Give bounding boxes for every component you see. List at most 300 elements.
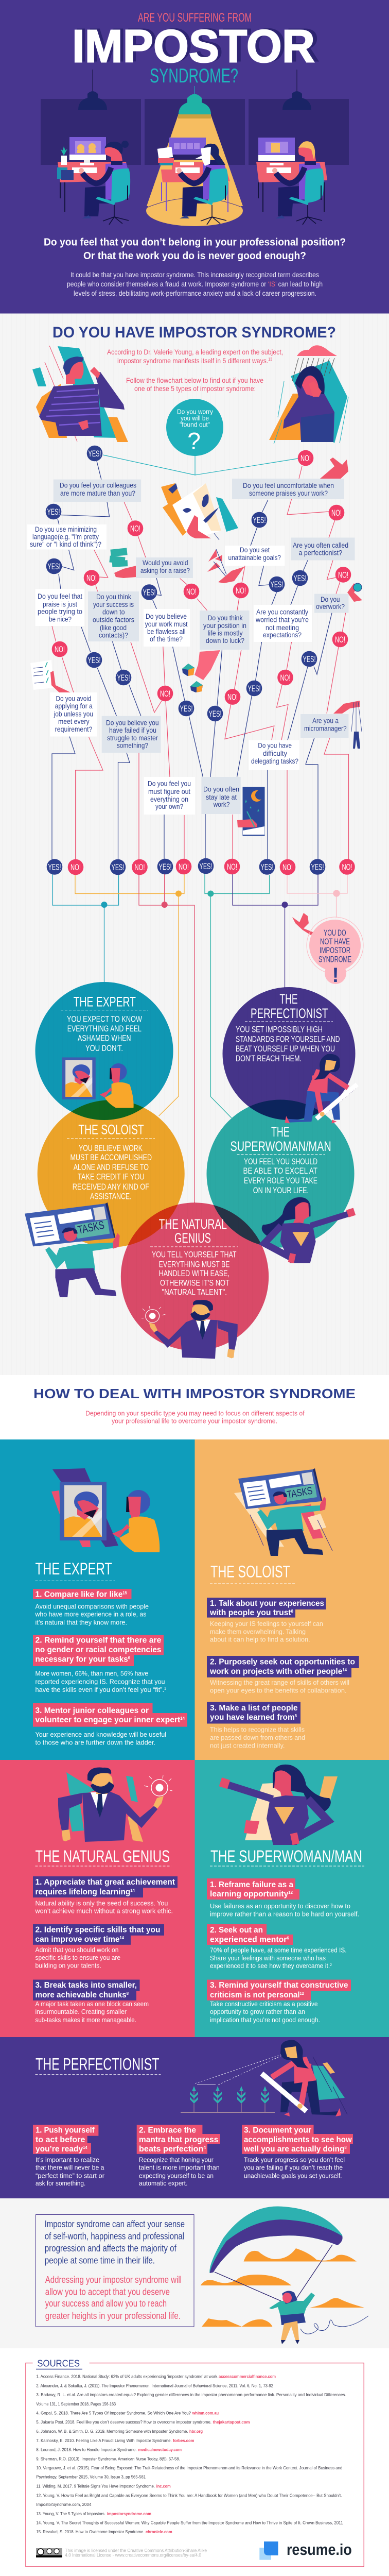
- logo: resume.io: [259, 2540, 352, 2560]
- question: flawless work: your work must: [145, 620, 188, 628]
- question: figure out on your own: Do you feel you: [148, 780, 191, 788]
- question: praise is just people being nice: Do you feel that: [38, 592, 82, 600]
- tip 3: Take constructive criticism as a positive: [210, 2001, 318, 2008]
- tip 3: 8: [127, 1991, 129, 1996]
- illustration: soloist carrying tasks board: TASKS: [77, 1218, 105, 1236]
- reference list: forbes.com: [173, 2438, 194, 2443]
- callout box: allow you to accept that you deserve: [45, 2286, 170, 2297]
- tip 3: volunteer to engage your inner expert: [35, 1716, 183, 1724]
- panel: the perfectionist: [0, 2037, 389, 2198]
- licence text: This image is licensed under the Creative Commons Attribution-Share Alike: [65, 2548, 207, 2553]
- tip 1: [207, 1878, 359, 1918]
- question: praise is just people being nice: praise is just: [43, 601, 77, 608]
- question: outside factors: down to: [102, 608, 125, 616]
- tip 2: have the skills even if you don’t feel you “fit”.: [35, 1686, 162, 1693]
- question: minimizing language: [27, 524, 107, 549]
- question: unattainable goals: [225, 546, 285, 566]
- question lines: Or that the work you do is never good enough?: [83, 250, 306, 262]
- heading: do you have impostor syndrome: DO YOU HAVE IMPOSTOR SYNDROME?: [52, 324, 336, 341]
- text: the natural genius: THE NATURAL: [159, 1216, 227, 1232]
- intro text: flowchart: [107, 348, 283, 393]
- eyebrow: are you suffering from: ARE YOU SUFFERING FROM: [138, 11, 252, 25]
- text: the perfectionist: BEAT YOURSELF UP WHEN YOU: [236, 1044, 335, 1054]
- question: flawless work: [144, 609, 190, 647]
- question: flawless work: be flawless all: [147, 628, 186, 636]
- tip 3: more achievable chunks: [35, 1991, 131, 1999]
- reference list: hbr.org: [189, 2429, 203, 2434]
- illustration: expert at mirror: [62, 1057, 134, 1108]
- illustration: natural genius with light bulb: [142, 1300, 238, 1359]
- tip 1: [33, 1589, 149, 1626]
- tip 2: beats perfection: [139, 2145, 203, 2154]
- illustration: soloist and tasks board: TASKS: [286, 1485, 313, 1501]
- callout box: [36, 2214, 194, 2327]
- yes and no answer nodes: NO!: [227, 692, 238, 702]
- question: perfectionist: a perfectionist?: [298, 549, 342, 556]
- icon: night desk and writing hand: [237, 787, 264, 836]
- yes and no answer nodes: YES!: [48, 862, 61, 872]
- centre workstation with masked person: [157, 138, 230, 225]
- tip 2: [207, 1924, 347, 1970]
- tip 2: 2. Embrace the: [139, 2126, 196, 2134]
- connector: yes routes to the expert: [52, 874, 118, 982]
- question: stay late: Do you often: [203, 786, 239, 793]
- text: the superwoman/man: ON IN YOUR LIFE.: [253, 1185, 309, 1195]
- question: overwork: overwork?: [316, 603, 345, 611]
- illustration: expert and mirror: [51, 1468, 160, 1552]
- heading: the expert: THE EXPERT: [35, 1560, 112, 1578]
- text: the soloist: TAKE CREDIT IF YOU: [78, 1172, 145, 1182]
- tip 1: 1. Push yourself: [36, 2126, 95, 2134]
- tip 2: 2. Purposely seek out opportunities to: [210, 1658, 355, 1667]
- reference list: accesscommercialfinance.com: [219, 2374, 276, 2379]
- yes and no answer nodes: YES!: [89, 449, 101, 459]
- tip 3: Track your progress so you don’t feel: [244, 2157, 345, 2164]
- yes and no answer nodes: YES!: [260, 862, 274, 872]
- reference list: chronicle.com: [146, 2529, 172, 2534]
- callout box: Impostor syndrome can affect your sense: [45, 2218, 185, 2229]
- question: praise: someone praises your work?: [249, 489, 328, 497]
- right workstation: [256, 138, 327, 225]
- reference list: 3. Badawy, R. L. et al. Are all impostors created equal? Exploring gender differences in the impostor phenomenon-performance link. Personality and Individual Differences.: [36, 2392, 346, 2397]
- yes and no answer nodes: YES!: [180, 704, 192, 714]
- text: the perfectionist: PERFECTIONIST: [251, 1006, 328, 1021]
- question: stay late: [202, 777, 241, 814]
- tip 1: “perfect time” to start or: [36, 2172, 104, 2179]
- yes and no answer nodes: NO!: [186, 587, 197, 597]
- section: how to deal heading block: [0, 1375, 389, 1439]
- illustration: sad woman under rain cloud: [269, 345, 348, 444]
- question: minimizing language: Do you use minimizing: [35, 526, 97, 533]
- tip 3: 12: [300, 1991, 305, 1996]
- licence text: [65, 2548, 207, 2558]
- yes and no answer nodes: YES!: [271, 580, 283, 589]
- illustration: superwoman: [219, 1765, 338, 1845]
- reference list: 1. Access Finance. 2018. National Study: 62% of UK adults experiencing ‘imposter syndrome’ at work.: [36, 2374, 218, 2379]
- tip 2: 2. Identify specific skills that you: [35, 1926, 161, 1935]
- question: perfectionist: [291, 538, 355, 561]
- tip 2: 2: [330, 1963, 332, 1967]
- reference list: impostorsyndrome.com: [107, 2511, 151, 2516]
- yes and no answer nodes: NO!: [331, 508, 342, 518]
- type circles group: [35, 982, 355, 1351]
- reference list: 2. Alexander, J. & Sakulku, J. (2011). The Impostor Phenomenon. International Journal of Behavioral Science, 2011, Vol. 6, No. 1, 73-92: [36, 2383, 273, 2388]
- text: the soloist: RECEIVED ANY KIND OF: [73, 1182, 149, 1192]
- tip 2: automatic expert.: [139, 2180, 187, 2187]
- yes and no answer nodes: YES!: [293, 573, 307, 583]
- question: praise: Do you feel uncomfortable when: [243, 482, 334, 489]
- question: outside factors: [88, 591, 139, 641]
- question: praise: [232, 479, 344, 499]
- yes and no answer nodes: YES!: [303, 654, 316, 664]
- tip 1: requires lifelong learning: [35, 1888, 134, 1896]
- tip 3: insurmountable. Creating smaller: [35, 2008, 127, 2015]
- tip 3: 3. Remind yourself that constructive: [210, 1981, 348, 1990]
- connector: routes to the superwoman/man: [205, 874, 270, 1118]
- text: the natural genius: "NATURAL TALENT".: [162, 1287, 227, 1297]
- callout box: people at some time in their life.: [45, 2255, 155, 2266]
- text: the perfectionist: DON'T REACH THEM.: [236, 1054, 302, 1063]
- reference list: inc.com: [156, 2483, 171, 2488]
- question: delegating: delegating tasks?: [251, 757, 298, 765]
- question: luck: [200, 611, 250, 650]
- reference list: 13. Young, V. The 5 Types of Impostors.: [36, 2511, 105, 2516]
- illustration: perfectionist with ruler: [285, 1054, 357, 1124]
- panel: the superwoman/man: [194, 1760, 389, 2037]
- tip 1: make them overwhelming. Talking: [210, 1629, 306, 1636]
- question: job requirements: [50, 692, 97, 737]
- question lines: [44, 237, 346, 262]
- text: the superwoman/man: BE ABLE TO EXCEL AT: [243, 1166, 317, 1176]
- text: the soloist: MUST BE ACCOMPLISHED: [70, 1153, 152, 1162]
- panel: the expert: [0, 1439, 194, 1760]
- start node: do you worry: [166, 399, 223, 456]
- yes and no answer nodes: NO!: [342, 862, 352, 872]
- yes and no answer nodes: YES!: [111, 862, 125, 872]
- tip 1: 14: [83, 2145, 87, 2150]
- tip 2: experienced mentor: [210, 1935, 288, 1944]
- tip 2: work on projects with other people: [210, 1667, 346, 1676]
- tip 2: Admit that you should work on: [35, 1946, 119, 1954]
- yes and no answer nodes: YES!: [47, 562, 61, 571]
- question: delegating: Do you have: [258, 742, 292, 750]
- intro paragraph: people who consider themselves a fraud at work. Imposter syndrome or ‘IS’ can lead to high: [67, 280, 323, 288]
- question: job requirements: meet every: [58, 718, 90, 725]
- question: figure out on your own: everything on: [150, 795, 188, 803]
- tip 2: 14: [342, 1668, 347, 1672]
- callout box: Addressing your impostor syndrome will: [45, 2274, 182, 2285]
- intro text: flowchart: one of these 5 types of impostor syndrome:: [134, 384, 256, 393]
- text: the perfectionist: STANDARDS FOR YOURSELF AND: [236, 1035, 340, 1044]
- tip 3: [33, 1979, 149, 2024]
- yes and no answer nodes: NO!: [227, 862, 237, 872]
- tip 2: [33, 1635, 166, 1693]
- panel: the natural genius: [0, 1760, 194, 2037]
- text: the superwoman/man: [231, 1124, 331, 1195]
- yes and no answer nodes: YES!: [311, 862, 324, 872]
- reference list: 7. Kalinosky, E. 2010. Feeling Like A Fraud: Living With Impostor Syndrome.: [36, 2438, 172, 2443]
- tip 1: with people you trust: [210, 1608, 293, 1617]
- tip 2: Share your feelings with someone who has: [210, 1955, 326, 1962]
- yes and no answer nodes: [46, 446, 355, 875]
- tip 3: 5: [295, 1714, 297, 1718]
- left workstation: [57, 137, 130, 225]
- yes and no answer nodes: NO!: [86, 573, 97, 583]
- start node: do you worry: you will be: [181, 414, 209, 422]
- yes and no answer nodes: NO!: [70, 862, 81, 872]
- section: conclusion: [0, 2198, 389, 2348]
- question lines: Do you feel that you don’t belong in your professional position?: [44, 237, 346, 248]
- tip 3: A major task taken as one block can seem: [35, 2001, 149, 2008]
- text: the perfectionist: YOU SET IMPOSSIBLY HIGH: [236, 1024, 323, 1034]
- text: the superwoman/man: YOU FEEL YOU SHOULD: [244, 1157, 317, 1166]
- text: the superwoman/man: SUPERWOMAN/MAN: [231, 1139, 331, 1154]
- callout box: of self-worth, happiness and professional: [45, 2230, 184, 2241]
- icon: thumbs up hand: [320, 457, 348, 479]
- text: the superwoman/man: EVERY ROLE YOU TAKE: [244, 1176, 317, 1185]
- yes and no answer nodes: NO!: [55, 645, 65, 654]
- text: the expert: ASHAMED WHEN: [78, 1033, 131, 1043]
- icon: hand and dice: [182, 650, 220, 692]
- question: job requirements: job unless you: [54, 710, 93, 718]
- section: flowchart background: [0, 313, 389, 1375]
- result: you do not have impostor syndrome: SYNDROME: [319, 955, 351, 964]
- tip 2: 2. Remind yourself that there are: [35, 1636, 161, 1645]
- tip 1: Avoid unequal comparisons with people: [35, 1603, 149, 1611]
- intro text: flowchart: Follow the flowchart below to find out if you have: [126, 376, 263, 384]
- tip 1: 1. Appreciate that great achievement: [35, 1878, 175, 1887]
- text: the expert: EVERYTHING AND FEEL: [67, 1024, 142, 1033]
- tip 2: 4: [203, 2145, 206, 2150]
- question: micromanager: [300, 714, 349, 738]
- intro text: flowchart: impostor syndrome manifests itself in 5 different ways.: [117, 357, 290, 365]
- question: job requirements: applying for a: [55, 702, 93, 710]
- result: you do not have impostor syndrome: !: [332, 964, 339, 987]
- text: the natural genius: HANDLED WITH EASE,: [159, 1268, 229, 1278]
- text: the soloist: THE SOLOIST: [78, 1122, 144, 1138]
- tip 2: [207, 1656, 359, 1694]
- question: outside factors: (like good: [100, 624, 127, 632]
- reference list: 10. Vergauwe, J. et al. (2015). Fear of Being Exposed: The Trait-Relatedness of the Impostor Phenomenon and its Relevance in the Work Context. Journal of Business and: [36, 2465, 343, 2470]
- question: job requirements: Do you avoid: [56, 695, 92, 703]
- question: stay late: work?: [213, 801, 229, 808]
- yes and no answer nodes: NO!: [179, 862, 189, 872]
- tip 2: Witnessing the great range of skills of others will: [210, 1679, 349, 1686]
- start node: do you worry: ?: [187, 428, 201, 454]
- tip 1: 15: [122, 1591, 128, 1596]
- tip 2: 1: [164, 1687, 166, 1691]
- question: job requirements: requirement?: [55, 725, 92, 733]
- heading: the soloist: THE SOLOIST: [210, 1562, 290, 1581]
- callout box: progression and affects the majority of: [45, 2243, 176, 2253]
- tip 2: Recognize that honing your: [139, 2157, 214, 2164]
- icon: flags in hand: [207, 549, 244, 583]
- reference list: 8. Leonard, J. 2018. How to Handle Impostor Syndrome.: [36, 2447, 137, 2452]
- tip 2: talent is more important than: [139, 2164, 220, 2172]
- tip 3: 3. Mentor junior colleagues or: [35, 1706, 149, 1715]
- icon: stopwatch and hand: [347, 583, 362, 602]
- tip 3: 8: [344, 2145, 347, 2150]
- text: the perfectionist: [236, 991, 340, 1063]
- intro text: flowchart: 13: [268, 357, 272, 362]
- section: sources: [0, 2348, 389, 2576]
- yes and no answer nodes: YES!: [87, 655, 101, 665]
- reference list: 5. Jakarta Post. 2018. Feel like you don’t deserve success? How to overcome impostor syndrome.: [36, 2419, 211, 2425]
- result: you do not have impostor syndrome: NOT HAVE: [320, 937, 350, 946]
- tip 2: specific skills to ensure you are: [35, 1954, 120, 1961]
- question: figure out on your own: [144, 777, 195, 815]
- yes and no answer nodes: NO!: [135, 862, 145, 872]
- illustration: soloist and tasks board: [234, 1468, 332, 1556]
- tip 1: 1. Talk about your experiences: [210, 1599, 324, 1608]
- circle: the natural genius: [121, 1202, 269, 1351]
- yes and no answer nodes: YES!: [209, 709, 221, 719]
- tip 3: well you are actually doing: [244, 2145, 349, 2154]
- icon: checklist and hand: [30, 660, 70, 692]
- tip 3: [33, 1703, 187, 1747]
- text: the soloist: [67, 1122, 155, 1201]
- spotlight cone: [146, 114, 243, 226]
- text: the expert: [61, 994, 148, 1053]
- yes and no answer nodes: YES!: [143, 587, 155, 598]
- intro paragraph: levels of stress, debilitating work-performance anxiety and a lack of career progression.: [74, 290, 316, 297]
- licence text: 4.0 International License - www.creativecommons.org/licenses/by-sa/4.0: [65, 2552, 201, 2558]
- icon: creative commons badge: [36, 2548, 62, 2557]
- question: luck: your position in: [203, 622, 246, 630]
- question: colleagues: Do you feel your colleagues: [60, 482, 136, 489]
- tip 1: [33, 2125, 104, 2187]
- yes and no answer nodes: YES!: [248, 684, 260, 693]
- tip 2: open your eyes to the benefits of collaboration.: [210, 1687, 347, 1694]
- yes and no answer nodes: NO!: [300, 453, 311, 463]
- icon: centre lamp: [179, 86, 211, 114]
- sources frame: [26, 2363, 364, 2567]
- tip 2: More women, 66%, than men, 56% have: [35, 1670, 148, 1677]
- tip 3: [242, 2125, 353, 2179]
- tip 3: unachievable goals you set yourself.: [244, 2172, 342, 2179]
- tip 3: opportunity to grow rather than an: [210, 2008, 305, 2015]
- reference list: ImpostorSyndrome.com, 2004: [36, 2502, 92, 2507]
- yes and no answer nodes: YES!: [200, 861, 212, 871]
- start node: do you worry: Do you worry: [177, 408, 213, 415]
- question: luck: life is mostly: [208, 630, 243, 637]
- icon: okay-gesture hand: [292, 913, 314, 935]
- question: luck: Do you think: [208, 614, 243, 622]
- dark wall panels: [41, 99, 349, 165]
- tip 1: ask for something.: [36, 2180, 85, 2187]
- tip 2: [137, 2125, 220, 2187]
- question: failure when struggling: have failed if you: [109, 726, 156, 734]
- reference list: 4. Gopal, S. 2018. There Are 5 Types Of Imposter Syndrome, So Which One Are You?: [36, 2411, 191, 2416]
- reference list: 6. Johnson, W. B. & Smith, D. G. 2019. Mentoring Someone with Imposter Syndrome.: [36, 2429, 188, 2434]
- tip 2: experienced it to see how they overcame it.: [210, 1962, 333, 1970]
- tip 3: [207, 1702, 305, 1750]
- reference list: medicalnewstoday.com: [138, 2447, 182, 2452]
- text: the expert: YOU DON'T.: [85, 1043, 123, 1053]
- circle: the superwoman/man: [207, 1099, 354, 1248]
- intro text: flowchart: According to Dr. Valerie Young, a leading expert on the subject,: [107, 348, 283, 356]
- question: failure when struggling: struggle to master: [107, 734, 158, 742]
- tip 2: 6: [287, 1936, 289, 1940]
- yes and no answer nodes: YES!: [253, 515, 266, 525]
- question: outside factors: your success is: [93, 601, 134, 608]
- tip 3: not just created internally.: [210, 1742, 285, 1750]
- question: outside factors: outside factors: [93, 616, 134, 623]
- yes and no answer nodes: YES!: [47, 507, 60, 517]
- yes and no answer nodes: YES!: [158, 862, 172, 872]
- question: colleagues: [54, 480, 141, 502]
- question: expectations: Are you constantly: [256, 608, 308, 616]
- text: the expert: THE EXPERT: [74, 994, 136, 1010]
- question: unattainable goals: Do you set: [240, 546, 270, 554]
- tip 1: Use failures as an opportunity to discover how to: [210, 1903, 350, 1910]
- question: minimizing language: language(e.g. "I'm pretty: [32, 533, 99, 541]
- yes and no answer nodes: NO!: [335, 635, 345, 645]
- tip 2: no gender or racial competencies: [35, 1646, 161, 1654]
- icon: money and hand: [109, 548, 136, 578]
- tip 2: 2. Seek out an: [210, 1926, 263, 1935]
- question: failure when struggling: something?: [117, 742, 148, 750]
- tip 2: reported experiencing IS. Recognize that you: [35, 1678, 165, 1685]
- callout box: greater heights in your professional life.: [45, 2310, 181, 2321]
- question: overwork: [314, 594, 349, 613]
- tip 3: 3. Make a list of people: [210, 1704, 298, 1713]
- callout box: your success and allow you to reach: [45, 2298, 167, 2309]
- tip 1: It’s important to realize: [36, 2157, 99, 2164]
- tip 3: are passed down from others and: [210, 1734, 305, 1741]
- tip 1: improve rather than a reason to be hard on yourself.: [210, 1911, 359, 1918]
- text: the soloist: YOU BELIEVE WORK: [79, 1143, 143, 1153]
- tip 3: you are failing if you don’t reach the: [244, 2164, 343, 2172]
- heading: the perfectionist: THE PERFECTIONIST: [36, 2055, 160, 2074]
- title: impostor: IMPOSTOR: [75, 20, 319, 71]
- tip 2: can improve over time: [35, 1935, 122, 1944]
- question: expectations: not meeting: [266, 624, 299, 632]
- question: praise is just people being nice: be nice?: [49, 615, 72, 623]
- text: the natural genius: [150, 1216, 238, 1297]
- tip 1: won’t achieve much without a strong work ethic.: [34, 1908, 173, 1915]
- tip 1: you’re ready: [36, 2145, 84, 2154]
- title: impostor: IMPOSTOR: [72, 21, 315, 72]
- question: figure out on your own: must figure out: [148, 788, 190, 795]
- logo: resume.io: resume.io: [287, 2540, 352, 2558]
- text: the soloist: ALONE AND REFUSE TO: [74, 1162, 149, 1172]
- result: you do not have impostor syndrome: YOU DO: [324, 928, 346, 938]
- section: how to deal heading block: your professional life to overcome your impostor syndrome.: [112, 1417, 277, 1425]
- circle: the expert: [35, 982, 173, 1120]
- tip 3: sub-tasks makes it more manageable.: [35, 2016, 136, 2024]
- tip 1: it’s natural that they know more.: [35, 1619, 127, 1626]
- reference list: 9. Sherman, R.O. (2013). Imposter Syndrome. American Nurse Today, 8(5), 57-58.: [36, 2456, 180, 2461]
- tip 1: 1. Reframe failure as a: [210, 1880, 293, 1889]
- tip 2: building on your talents.: [35, 1962, 101, 1969]
- section: how to deal heading block: HOW TO DEAL WITH IMPOSTOR SYNDROME: [33, 1386, 356, 1401]
- question: outside factors: contacts)?: [99, 631, 128, 639]
- illustration: superwoman: [262, 1197, 356, 1263]
- section: hero: [0, 0, 389, 313]
- question: flawless work: Do you believe: [146, 613, 187, 620]
- question: stay late: stay late at: [206, 793, 237, 801]
- section: how to deal heading block: Depending on your specific type you may need to focus on different aspects of: [85, 1409, 305, 1417]
- yes and no answer nodes: NO!: [338, 570, 348, 580]
- connector: routes to the perfectionist: [233, 874, 318, 988]
- icon: left lamp: [78, 70, 107, 110]
- reference list: 15. Revuluri, S. 2018. How to Overcome Impostor Syndrome.: [36, 2529, 145, 2534]
- tip 2: necessary for your tasks: [35, 1655, 132, 1664]
- question: expectations: worried that you're: [255, 616, 309, 623]
- yes and no answer nodes: NO!: [130, 523, 140, 534]
- reference list: 14. Young, V. The Secret Thoughts of Successful Women: Why Capable People Suffer from the Impostor Syndrome and How to Thrive in Spite of It. Crown Business, 2011: [36, 2520, 343, 2526]
